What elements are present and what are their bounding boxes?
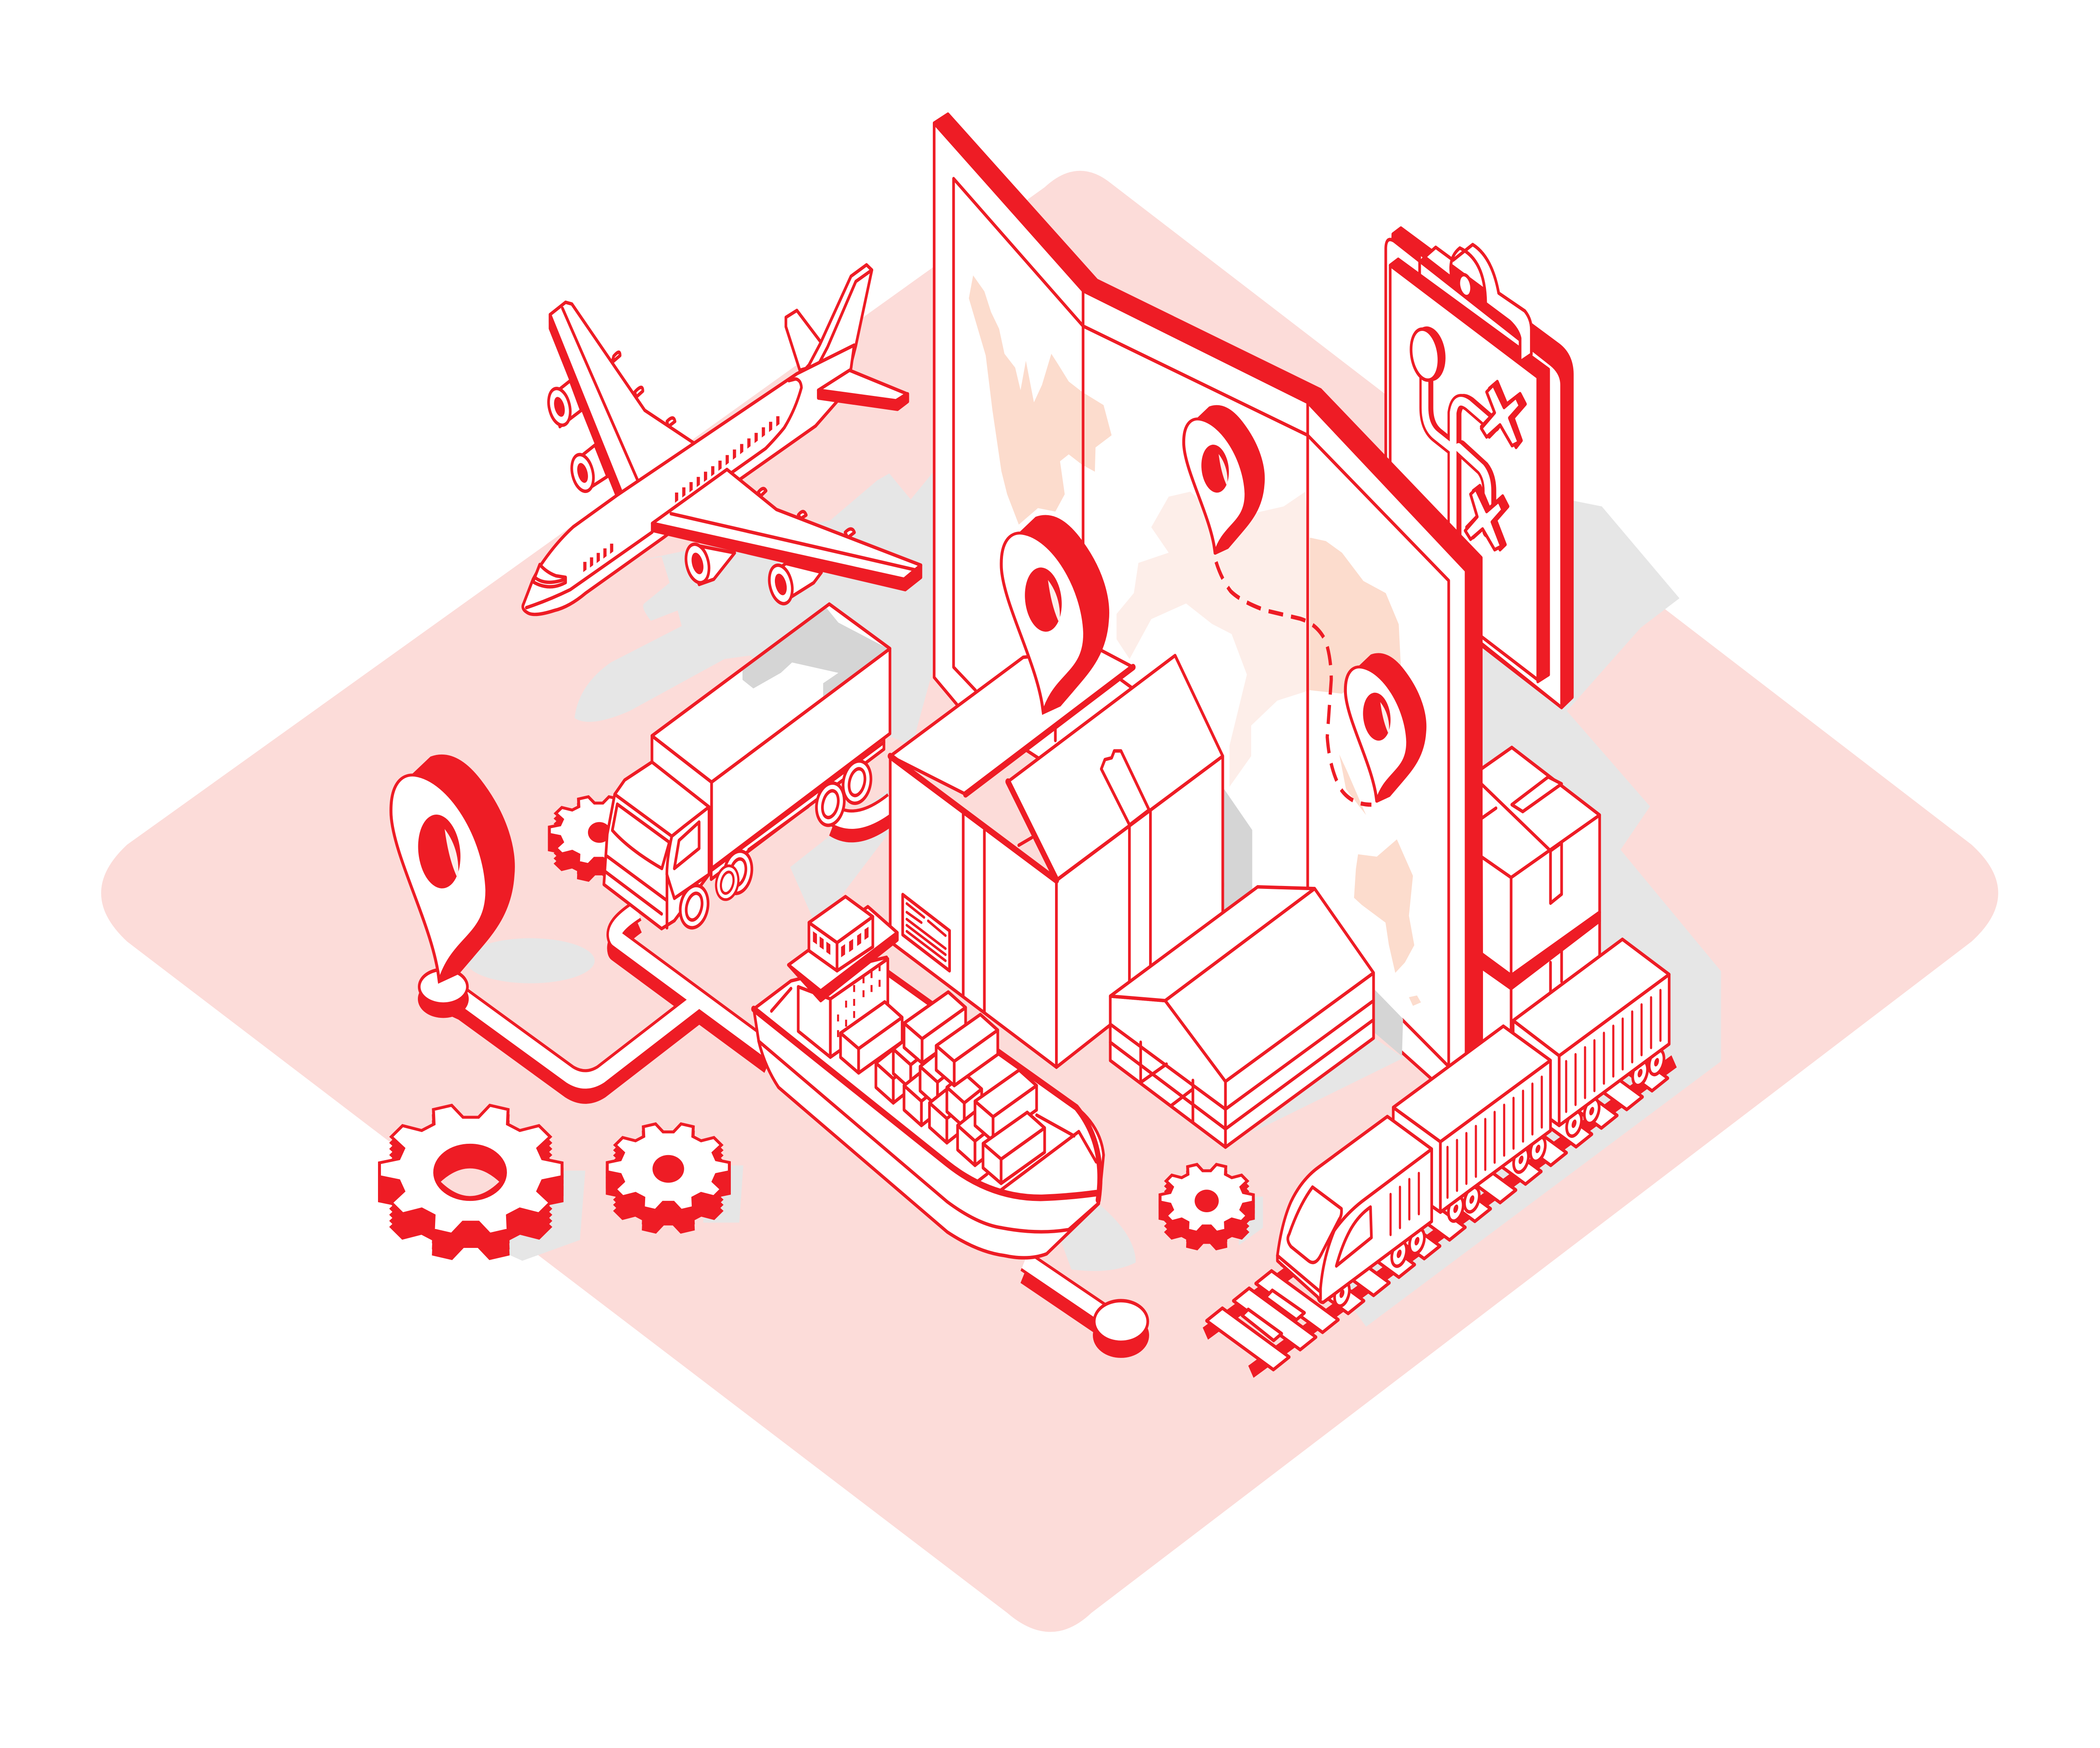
truck side window [675,822,699,868]
continent: small island [1409,996,1421,1006]
folded world map [934,114,1481,1110]
truck chassis [711,735,884,879]
route depth [443,813,1109,1330]
airplane [523,265,921,614]
clipboard with route plan [1385,228,1572,708]
inner rail gaps [1242,1290,1305,1341]
large location pin [391,756,513,982]
far wing [550,302,694,495]
bridge cabin [809,896,873,971]
box right face [1056,756,1223,1067]
clipboard board [1385,228,1572,708]
clipboard cross marks [1465,382,1525,550]
near engines [682,540,822,608]
clipboard clip [1420,244,1531,362]
continent: south-east [1354,839,1414,973]
clip hole [1457,273,1474,299]
flap tape [1101,751,1149,825]
upper box [1481,747,1600,975]
bridge deck plate [788,907,897,1001]
shipping label [903,894,950,971]
deck thick edge [754,973,1100,1200]
train [1277,939,1669,1309]
railway track [1205,1014,1674,1372]
box front edge [1511,878,1512,975]
continent: central light [1116,492,1310,787]
ground shadows [466,472,1721,1327]
map pin: right [1345,655,1425,801]
warehouse long roof [1165,888,1373,1082]
clipboard start point [1407,324,1449,384]
near stabiliser [818,370,908,409]
gear: large [380,1105,562,1258]
map folds [1083,291,1308,902]
truck cab [604,762,709,929]
truck windscreen [612,804,669,868]
box separator [1482,912,1600,988]
sleepers [1207,1029,1668,1370]
locomotive vents [1391,1173,1419,1235]
warehouse gable roof [1110,887,1315,1001]
hull band [759,1041,1098,1232]
cockpit windscreen [533,564,566,587]
bridge tower [798,959,888,1057]
ship hull [754,957,1104,1258]
locomotive side window [1336,1207,1371,1266]
box vertical tape lines [963,810,1150,1013]
box tape [1512,777,1562,903]
clipboard route [1425,368,1495,555]
shadows beside big box [1224,789,1403,1056]
fuselage belly line [526,379,801,608]
continent: islands [1339,755,1366,815]
flap thick edge [966,667,1133,794]
gear: behind truck [549,797,648,880]
truck [604,604,890,933]
truck roof outline [652,604,890,782]
locomotive body [1277,1116,1432,1302]
passenger windows [583,416,780,572]
near wing [652,469,921,590]
dashed route on map [1216,562,1371,805]
map top edge [934,114,1481,1053]
truck front wheel [675,880,713,933]
wagon: front [1393,1026,1551,1212]
far stabiliser [786,310,821,370]
lower box [1482,921,1600,1049]
wagon: rear [1513,939,1669,1125]
fuselage [523,345,854,614]
deck stern line [772,988,1096,1191]
flap inner lines [1019,680,1132,845]
rails [1205,1014,1674,1372]
locomotive roof line [1277,1149,1432,1299]
wagon wheels [1332,1047,1667,1309]
map pin: middle [1184,406,1263,553]
gear: medium [607,1124,730,1232]
gear: small right [1160,1164,1253,1249]
locomotive windshield [1288,1187,1341,1263]
continent: east [1310,537,1401,694]
big pin base node [419,970,467,1016]
warehouse dock lines [1141,1042,1193,1122]
route outline [443,803,1109,1318]
warehouse walls [1110,973,1373,1147]
upper box top [1481,747,1600,878]
tail fin [798,265,872,384]
big cardboard box [890,649,1223,1067]
cargo ship [754,896,1104,1258]
map pin: on box [1001,516,1108,713]
continents [969,275,1421,1006]
containers [840,992,1045,1183]
continent: north-west [969,275,1112,524]
map sheet [934,123,1466,1110]
far engines [545,381,607,495]
truck cargo box [652,604,890,868]
back left flap [890,649,1133,794]
front right flap [1008,655,1223,880]
background: pink isometric platform [101,171,1998,1632]
box left face [890,756,1056,1067]
cardboard boxes stack [1481,747,1600,1049]
route surface [443,803,1109,1318]
thick rim [890,756,1056,881]
warehouse [1110,887,1373,1147]
warehouse wall bands [1110,1001,1373,1147]
truck rear wheels [712,755,876,904]
route end node [1094,1301,1148,1356]
map inner frame [953,178,1449,1067]
shadow on truck roof [743,607,888,697]
transport route network [443,803,1109,1330]
